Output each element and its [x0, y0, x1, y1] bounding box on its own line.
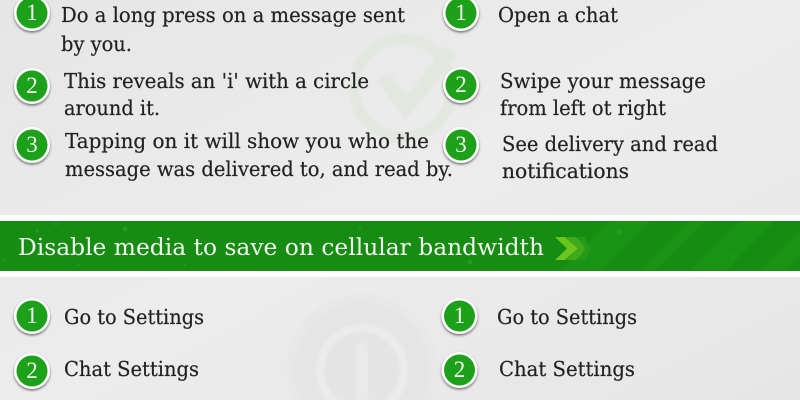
badge 3	[14, 127, 50, 163]
badge 1: 1	[26, 0, 38, 25]
watermark: check mark icon	[354, 39, 452, 137]
badge 1	[14, 298, 50, 334]
badge 1: 1	[26, 303, 38, 328]
steps: left column, top	[14, 0, 453, 181]
step 1 text: Do a long press on a message sent	[61, 3, 406, 27]
badge 2	[442, 352, 478, 388]
badge 2	[14, 68, 50, 104]
step 2 text: Chat Settings	[64, 357, 199, 381]
badge 1	[443, 0, 479, 31]
step 2 text: This reveals an 'i' with a circle	[64, 69, 369, 93]
step 2 text: Chat Settings	[499, 357, 635, 381]
badge 1: 1	[455, 0, 467, 25]
section banner	[0, 215, 800, 277]
step 1 text: Open a chat	[498, 3, 619, 27]
badge 2: 2	[454, 357, 465, 382]
badge 2: 2	[26, 358, 38, 383]
step 3 text: message was delivered to, and read by.	[65, 157, 453, 181]
badge 1	[14, 0, 50, 31]
step 2 text: from left ot right	[500, 96, 667, 120]
step 3 text: notifications	[502, 159, 629, 183]
badge 3: 3	[455, 132, 467, 157]
badge 1: 1	[454, 303, 465, 328]
badge 1	[442, 298, 478, 334]
steps: left column, bottom	[14, 298, 204, 389]
step 3 text: Tapping on it will show you who the	[65, 129, 429, 153]
step 2 text: Swipe your message	[500, 69, 706, 93]
steps: right column, bottom	[442, 298, 637, 388]
step 1 text: Go to Settings	[64, 305, 204, 329]
watermark: power icon	[286, 294, 438, 400]
icon: chevrons	[555, 237, 591, 260]
badge 2	[14, 353, 50, 389]
badge 3: 3	[26, 132, 38, 157]
steps: right column, top	[443, 0, 718, 183]
banner title: Disable media to save on cellular bandwidth	[18, 233, 544, 261]
badge 2: 2	[26, 73, 38, 98]
badge 3	[443, 127, 479, 163]
step 3 text: See delivery and read	[502, 132, 718, 156]
badge 2	[443, 67, 479, 103]
step 1 text: by you.	[61, 32, 132, 56]
step 2 text: around it.	[64, 96, 160, 120]
badge 2: 2	[455, 72, 467, 97]
step 1 text: Go to Settings	[497, 305, 637, 329]
